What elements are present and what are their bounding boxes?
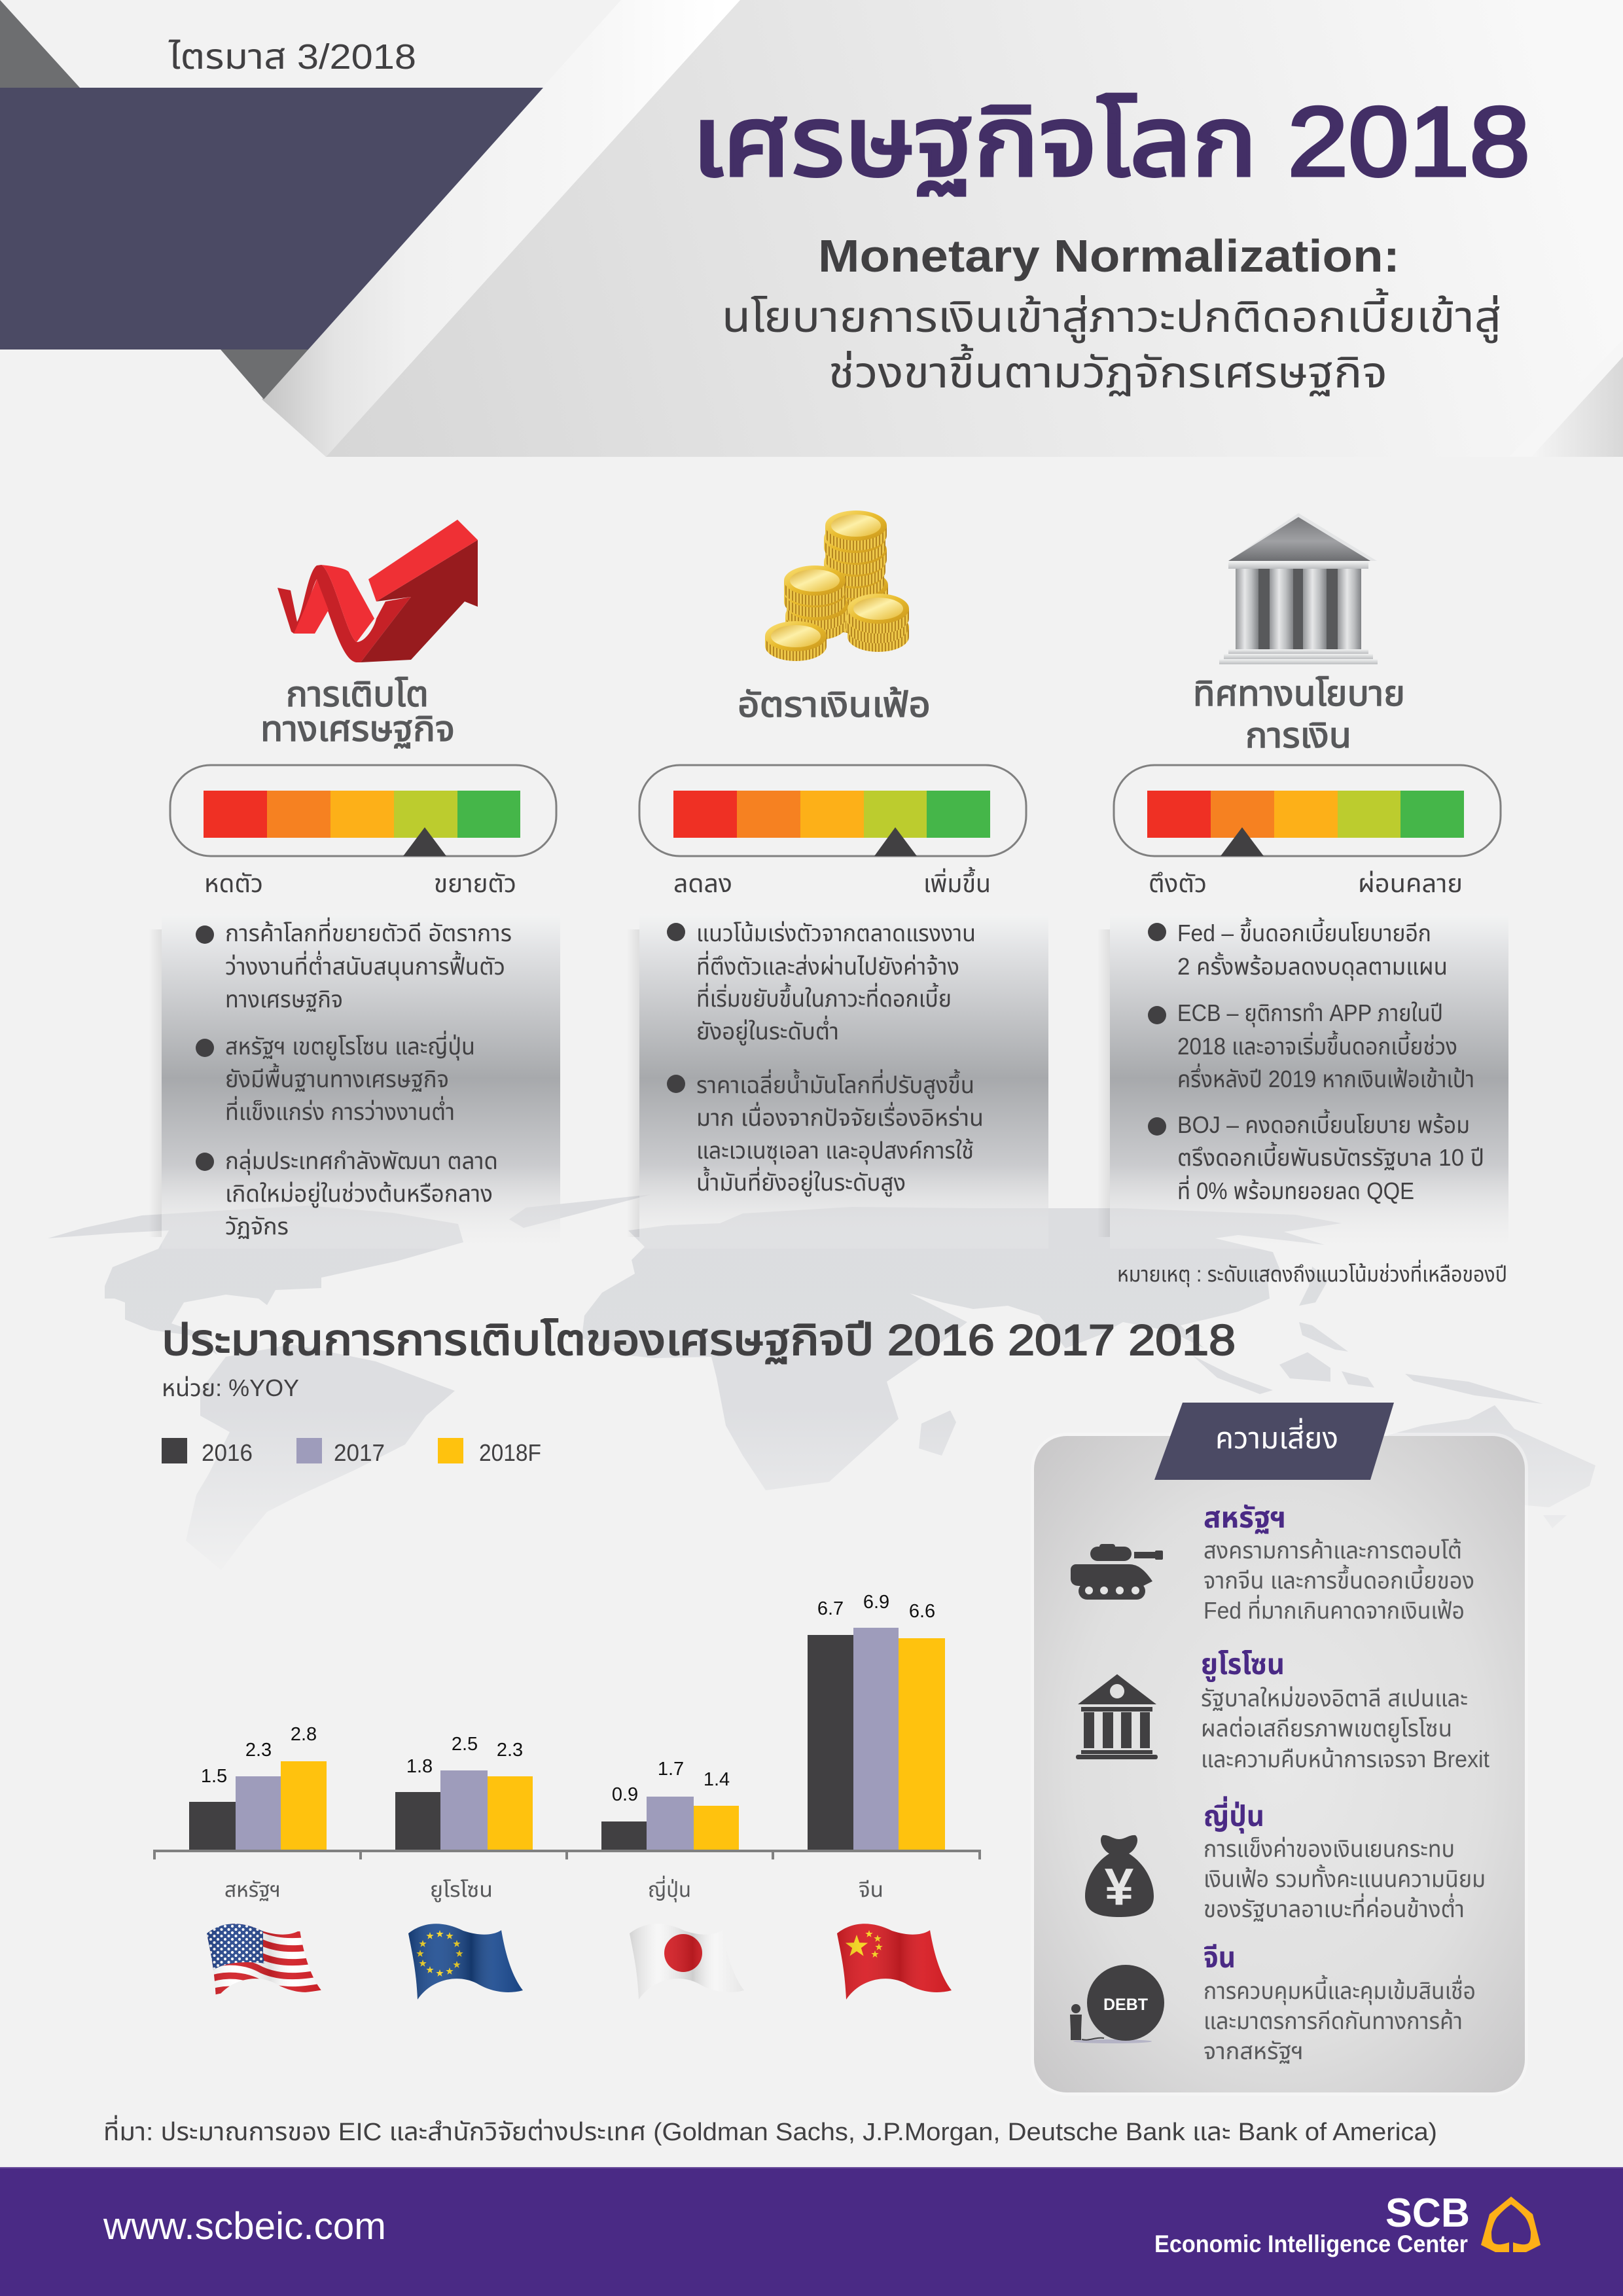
bullet list: growth: ทางเศรษฐกิจ <box>225 986 343 1013</box>
SCB name: SCB <box>1385 2191 1470 2236</box>
text: เงินเฟ้อ รวมทั้งคะแนนความนิยม <box>1204 1864 1486 1892</box>
chart heading: ประมาณการการเติบโตของเศรษฐกิจปี 2016 2017 2018 <box>162 1316 1236 1364</box>
subtitle english: Monetary Normalization: <box>818 230 1400 281</box>
gauge labels: ขยายตัว <box>434 870 516 898</box>
grey corner triangle <box>0 0 80 88</box>
gauge labels: เพิ่มขึ้น <box>923 867 991 898</box>
gauge labels: ลดลง <box>673 870 732 898</box>
text <box>1201 1685 1489 1772</box>
text: ผลต่อเสถียรภาพเขตยูโรโซน <box>1201 1715 1452 1742</box>
text <box>1204 1975 1476 2064</box>
text <box>1204 1537 1474 1624</box>
bar chart <box>153 1592 981 1903</box>
bars: USA <box>189 1761 327 1850</box>
grey lower triangle <box>221 350 308 399</box>
category labels <box>224 1875 883 1903</box>
bullet list: inflation: และเวเนซุเอลา และอุปสงค์การใช้ <box>696 1137 974 1164</box>
chart legend: 2018F <box>479 1439 541 1466</box>
icon: bank building <box>1219 513 1378 664</box>
value labels: 1.8 <box>406 1756 433 1777</box>
x axis <box>153 1850 981 1859</box>
bullet list: inflation: ที่ตึงตัวและส่งผ่านไปยังค่าจ้าง <box>696 950 959 980</box>
gauge: growth <box>170 765 556 856</box>
bullet list: inflation: ราคาเฉลี่ยน้ำมันโลกที่ปรับสูงขึ้น <box>696 1069 974 1099</box>
icon: debt ball <box>1070 1965 1164 2043</box>
text: การควบคุมหนี้และคุมเข้มสินเชื่อ <box>1204 1975 1476 2005</box>
bullet list: growth: การค้าโลกที่ขยายตัวดี อัตราการ <box>225 917 512 946</box>
panel: inflation details <box>626 914 1048 1249</box>
world map background <box>48 1194 1596 1570</box>
value labels: 1.5 <box>201 1766 227 1787</box>
icon: tank <box>1071 1544 1163 1600</box>
bullet list: policy: ตรึงดอกเบี้ยพันธบัตรรัฐบาล 10 ปี <box>1177 1141 1484 1171</box>
flag: Japan <box>630 1926 743 1999</box>
dark navy block <box>0 88 543 350</box>
source line: ที่มา: ประมาณการของ EIC และสำนักวิจัยต่างประเทศ (Goldman Sachs, J.P.Morgan, Deutsche Bank และ Bank of America) <box>103 2115 1437 2146</box>
bars: Eurozone <box>395 1770 533 1850</box>
bars: Japan <box>601 1797 739 1850</box>
risk: Eurozone <box>1076 1649 1489 1772</box>
bullet list: growth: เกิดใหม่อยู่ในช่วงต้นหรือกลาง <box>225 1180 493 1208</box>
bullet list: policy: ที่ 0% พร้อมทยอยลด QQE <box>1177 1175 1414 1204</box>
chart unit: หน่วย: %YOY <box>162 1374 299 1401</box>
bullet list: growth: สหรัฐฯ เขตยูโรโซน และญี่ปุ่น <box>225 1030 475 1060</box>
heading: monetary policy <box>1193 674 1405 755</box>
heading: growth: การเติบโต <box>286 675 429 714</box>
panel: policy details <box>1097 914 1508 1249</box>
bullet list: policy: 2 ครั้งพร้อมลดงบดุลตามแผน <box>1177 952 1448 980</box>
value labels: 0.9 <box>612 1784 638 1805</box>
flag: USA <box>207 1924 321 1995</box>
footnote: หมายเหตุ : ระดับแสดงถึงแนวโน้มช่วงที่เหลือของปี <box>1117 1259 1507 1287</box>
icon: bank <box>1076 1674 1158 1759</box>
risk: USA <box>1071 1502 1474 1624</box>
flag: China <box>837 1924 952 2000</box>
category labels: จีน <box>859 1878 883 1901</box>
text: จากจีน และการขึ้นดอกเบี้ยของ <box>1204 1564 1474 1594</box>
value labels: 6.9 <box>863 1592 889 1613</box>
icon: money bag: ¥ <box>1105 1857 1134 1916</box>
bullet list: inflation: น้ำมันที่ยังอยู่ในระดับสูง <box>696 1166 906 1196</box>
bullet list: policy <box>1148 917 1484 1204</box>
main title: เศรษฐกิจโลก 2018 <box>692 86 1530 196</box>
text: จากสหรัฐฯ <box>1204 2037 1304 2064</box>
icon: red growth arrow <box>277 520 478 662</box>
heading: จีน <box>1204 1942 1236 1974</box>
bullet list: inflation: แนวโน้มเร่งตัวจากตลาดแรงงาน <box>696 920 976 946</box>
footer bar <box>0 2167 1623 2296</box>
chart legend: 2016 <box>202 1439 253 1466</box>
bullet list: growth: กลุ่มประเทศกำลังพัฒนา ตลาด <box>225 1147 498 1175</box>
bullet list: growth <box>196 917 512 1240</box>
bullet list: policy: 2018 และอาจเริ่มขึ้นดอกเบี้ยช่วง <box>1177 1030 1457 1060</box>
bullet list: policy: ครึ่งหลังปี 2019 หากเงินเฟ้อเข้าเป้า <box>1177 1063 1474 1092</box>
quarter label: ไตรมาส 3/2018 <box>168 37 416 77</box>
value labels: 2.8 <box>291 1724 317 1745</box>
flag: EU <box>408 1924 523 2000</box>
header diagonal white band <box>262 0 740 457</box>
header light background <box>326 0 1623 457</box>
icon: SCB logo <box>1481 2197 1541 2252</box>
chart legend <box>162 1438 541 1466</box>
heading: สหรัฐฯ <box>1204 1502 1286 1534</box>
risk tab label: ความเสี่ยง <box>1215 1418 1338 1455</box>
bullet list: growth: ที่แข็งแกร่ง การว่างงานต่ำ <box>225 1096 455 1125</box>
heading: growth: ทางเศรษฐกิจ <box>260 709 455 749</box>
header bottom-right corner <box>1509 340 1623 457</box>
text <box>1204 1835 1486 1922</box>
heading: monetary policy: การเงิน <box>1245 716 1351 755</box>
text: ของรัฐบาลอาเบะที่ค่อนข้างต่ำ <box>1204 1893 1465 1922</box>
risk tab <box>1154 1403 1394 1480</box>
category labels: ญี่ปุ่น <box>648 1875 691 1902</box>
subtitle thai line 2: ช่วงขาขึ้นตามวัฏจักรเศรษฐกิจ <box>829 344 1387 397</box>
icon: money bag <box>1085 1835 1154 1917</box>
risk: Japan <box>1085 1796 1486 1922</box>
text: และมาตรการกีดกันทางการค้า <box>1204 2007 1463 2034</box>
bars: China <box>808 1628 945 1850</box>
text: และความคืบหน้าการเจรจา Brexit <box>1201 1746 1489 1772</box>
bullet list: inflation: มาก เนื่องจากปัจจัยเรื่องอิหร่าน <box>696 1102 984 1131</box>
text: สงครามการค้าและการตอบโต้ <box>1204 1537 1462 1564</box>
category labels: สหรัฐฯ <box>224 1878 281 1901</box>
value labels: 2.3 <box>497 1740 523 1761</box>
heading: ยูโรโซน <box>1201 1649 1285 1682</box>
gauge labels: ผ่อนคลาย <box>1358 870 1463 898</box>
gauge labels: ตึงตัว <box>1149 870 1207 898</box>
subtitle thai line 1: นโยบายการเงินเข้าสู่ภาวะปกติดอกเบี้ยเข้าสู่ <box>722 288 1501 344</box>
value labels <box>201 1592 935 1805</box>
value labels: 2.3 <box>245 1740 272 1761</box>
bullet list: growth: ว่างงานที่ต่ำสนับสนุนการฟื้นตัว <box>225 950 505 980</box>
text: Fed ที่มากเกินคาดจากเงินเฟ้อ <box>1204 1594 1465 1624</box>
bullet list: inflation <box>667 920 984 1196</box>
bullet list: growth: ยังมีพื้นฐานทางเศรษฐกิจ <box>225 1063 449 1092</box>
risk: China <box>1070 1942 1476 2064</box>
bullet list: policy: Fed – ขึ้นดอกเบี้ยนโยบายอีก <box>1177 917 1431 946</box>
gauge labels <box>204 867 1463 898</box>
chart legend: 2017 <box>334 1439 385 1466</box>
category labels: ยูโรโซน <box>430 1878 493 1903</box>
panel: growth details <box>149 914 560 1249</box>
gauge: inflation <box>639 765 1026 856</box>
gauge labels: หดตัว <box>204 870 263 898</box>
text: การแข็งค่าของเงินเยนกระทบ <box>1204 1835 1455 1862</box>
gauge: policy <box>1114 765 1501 856</box>
bullet list: growth: วัฏจักร <box>225 1213 289 1240</box>
heading: monetary policy: ทิศทางนโยบาย <box>1193 674 1405 713</box>
value labels: 2.5 <box>452 1734 478 1755</box>
text: รัฐบาลใหม่ของอิตาลี สเปนและ <box>1201 1685 1468 1712</box>
value labels: 1.7 <box>658 1759 684 1780</box>
bullet list: policy: ECB – ยุติการทำ APP ภายในปี <box>1177 999 1443 1027</box>
EIC name: Economic Intelligence Center <box>1154 2231 1468 2257</box>
panel: risks <box>1031 1403 1528 2096</box>
value labels: 1.4 <box>704 1769 730 1790</box>
website: www.scbeic.com <box>103 2205 386 2248</box>
bullet list: inflation: ยังอยู่ในระดับต่ำ <box>696 1015 839 1045</box>
panel: header banner <box>0 0 1623 457</box>
heading: inflation: อัตราเงินเฟ้อ <box>738 685 931 725</box>
heading: ญี่ปุ่น <box>1204 1796 1264 1834</box>
icon: debt ball: DEBT <box>1103 1996 1148 2014</box>
icon: gold coins <box>765 511 909 661</box>
bullet list: inflation: ที่เริ่มขยับขึ้นในภาวะที่ดอกเบี้ย <box>696 982 952 1012</box>
heading: growth <box>260 675 455 749</box>
bullet list: policy: BOJ – คงดอกเบี้ยนโยบาย พร้อม <box>1177 1109 1470 1138</box>
value labels: 6.6 <box>909 1601 935 1622</box>
value labels: 6.7 <box>817 1598 844 1619</box>
